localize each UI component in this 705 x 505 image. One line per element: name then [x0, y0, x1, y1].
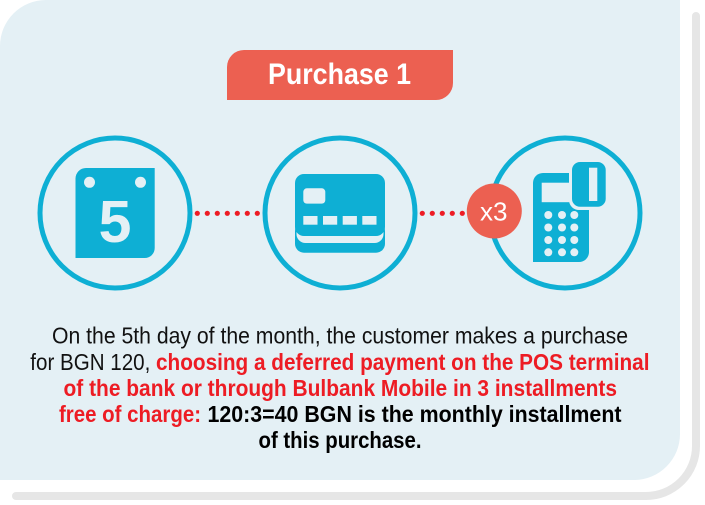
text block: description: for BGN 120, — [30, 349, 150, 375]
dotted connector 2 — [420, 211, 465, 216]
text block: description: choosing a deferred payment on the POS terminal — [156, 349, 650, 375]
text block: description: free of charge: — [59, 401, 201, 427]
dotted connector 1 — [195, 211, 260, 216]
icon: POS terminal in circle — [490, 138, 640, 288]
text block: description: On the 5th day of the month, the customer makes a purchase — [52, 322, 628, 348]
text block: description: 120:3=40 BGN is the monthly installment — [208, 401, 622, 427]
text block: description — [30, 322, 650, 453]
icon: calendar in circle: 5 — [99, 189, 131, 255]
icon: calendar in circle — [40, 138, 190, 288]
heading: Purchase 1 — [227, 50, 453, 100]
text block: description: of the bank or through Bulbank Mobile in 3 installments — [64, 375, 617, 401]
icon: bank card in circle — [265, 138, 415, 288]
badge: x3: x3 — [480, 197, 508, 227]
badge: x3 — [467, 184, 522, 238]
heading: Purchase 1: Purchase 1 — [268, 58, 411, 91]
text block: description: of this purchase. — [258, 427, 422, 453]
